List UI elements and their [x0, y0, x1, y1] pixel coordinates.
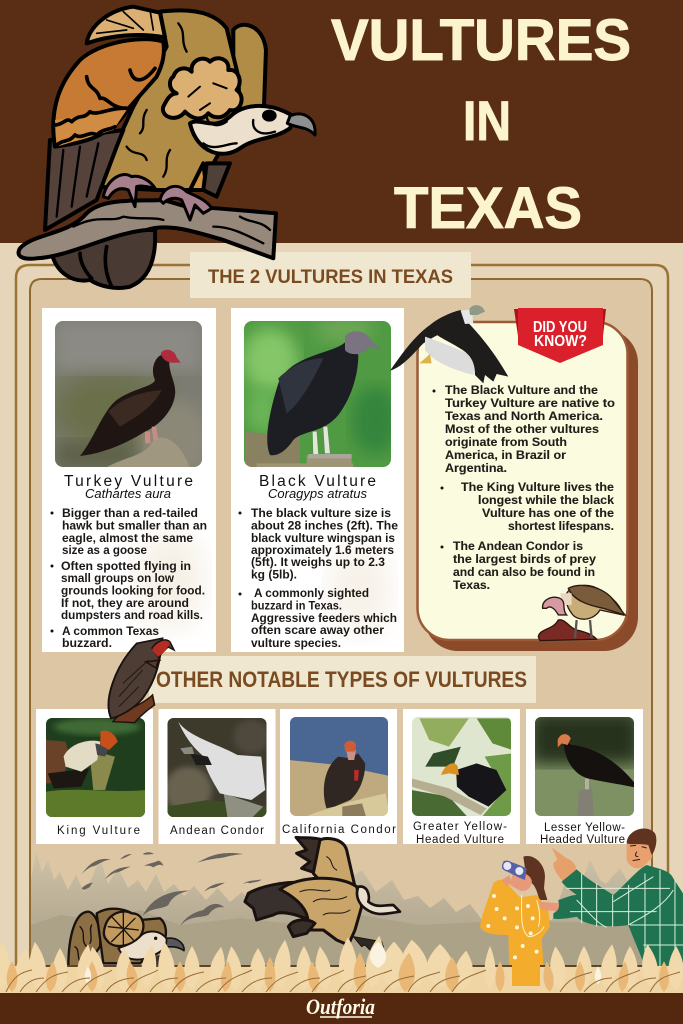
head: [627, 837, 654, 868]
badge: did you know: DID YOU: [533, 319, 587, 336]
icon: perched turkey vulture: [109, 638, 162, 723]
heading: the 2 vultures in texas: THE 2 VULTURES IN TEXAS: [208, 267, 453, 288]
ruff: [163, 58, 242, 119]
bullets: turkey vulture: small groups on low: [61, 572, 175, 585]
fact: andean condor: the largest birds of prey: [453, 552, 596, 566]
fact: lifespans: shortest lifespans.: [508, 519, 614, 533]
bullets: black vulture: (5ft). It weighs up to 2.3: [251, 556, 386, 569]
card: andean condor: Andean Condor: [170, 825, 264, 837]
latin name: cathartes aura: Cathartes aura: [85, 487, 171, 501]
card: king vulture: King Vulture: [57, 825, 140, 837]
fact: andean condor: and can also be found in: [453, 565, 595, 579]
icon: flying condor: [390, 305, 508, 383]
bullets: turkey vulture: Bigger than a red-tailed: [62, 507, 198, 520]
wheat grass foreground: [0, 934, 683, 993]
bullets: black vulture: [238, 507, 399, 650]
footer band: [0, 993, 683, 1024]
fact: native vultures: originate from South: [445, 435, 567, 449]
near wing: [296, 837, 327, 873]
bullets: turkey vulture: buzzard.: [62, 637, 112, 650]
tail feathers: [52, 230, 155, 288]
fact: andean condor: [440, 539, 596, 592]
panel: did you know: [418, 322, 638, 651]
heading: the 2 vultures in texas: [190, 252, 471, 298]
bullets: turkey vulture: eagle, almost the same: [62, 532, 194, 545]
bullets: turkey vulture: size as a goose: [62, 544, 148, 557]
fact: lifespans: Vulture has one of the: [482, 506, 614, 520]
card: lesser yellow-headed vulture: Headed Vulture: [540, 834, 625, 846]
bullets: turkey vulture: dumpsters and road kills.: [61, 609, 203, 622]
fact: native vultures: Turkey Vulture are native to: [445, 396, 615, 410]
card: california condor: California Condor: [282, 824, 396, 836]
fact: native vultures: The Black Vulture and the: [445, 383, 598, 397]
photo: greater yellow-headed vulture: [411, 717, 512, 818]
bullets: turkey vulture: A common Texas: [62, 625, 159, 638]
card: greater yellow-headed vulture: Headed Vulture: [416, 834, 504, 846]
photo: king vulture: [46, 717, 147, 818]
fact: lifespans: The King Vulture lives the: [461, 480, 614, 494]
tail: [288, 920, 315, 937]
body: [280, 878, 362, 945]
bullets: black vulture: Aggressive feeders which: [251, 612, 397, 625]
fact: andean condor: The Andean Condor is: [453, 539, 583, 553]
orange wing: [53, 39, 164, 147]
icon: perched vulture head: [146, 640, 174, 668]
rear wing: [233, 25, 266, 120]
illustration: large perched vulture: [19, 7, 315, 288]
head and neck: [190, 106, 295, 154]
title: TEXAS: [394, 176, 582, 241]
illustration: man pointing: [552, 829, 683, 967]
far wing: [245, 882, 323, 920]
fact: native vultures: Argentina.: [445, 461, 507, 475]
dark wing feathers: [45, 130, 123, 230]
bullets: turkey vulture: Often spotted flying in: [61, 560, 191, 573]
logo: outforia: Outforia: [306, 994, 375, 1019]
photo: turkey vulture: [55, 321, 202, 467]
card: lesser yellow-headed vulture: Lesser Yellow-: [544, 822, 625, 834]
tan crest: [87, 7, 165, 43]
photo: andean condor: [164, 717, 269, 818]
branch: [19, 200, 276, 259]
fact: native vultures: Most of the other vultures: [445, 422, 599, 436]
photo: california condor: [289, 717, 390, 818]
neck and head: [357, 886, 400, 914]
card: black vulture: [231, 308, 404, 652]
illustration: girl with binoculars: [480, 856, 563, 987]
latin name: coragyps atratus: Coragyps atratus: [268, 487, 367, 501]
bullets: turkey vulture: If not, they are around: [61, 597, 189, 610]
fact: native vultures: [432, 383, 615, 475]
heading: other notable types of vultures: OTHER NOTABLE TYPES OF VULTURES: [156, 667, 527, 692]
body: [97, 10, 240, 190]
legs: [353, 937, 383, 952]
bullets: black vulture: The black vulture size is: [251, 507, 391, 520]
icon: vulture on carcass: [538, 585, 625, 641]
card: lesser yellow-headed vulture: [526, 709, 643, 846]
bullets: black vulture: approximately 1.6 meters: [251, 544, 394, 557]
bullets: black vulture: vulture species.: [251, 637, 341, 650]
bullets: black vulture: A commonly sighted: [254, 587, 369, 600]
card: greater yellow-headed vulture: Greater Yellow-: [413, 821, 507, 833]
card: andean condor: [158, 709, 276, 844]
bullets: black vulture: often scare away other: [251, 624, 385, 637]
talons: [103, 175, 155, 207]
badge: did you know: KNOW?: [534, 333, 587, 350]
illustration: vulture in the grass: [68, 909, 184, 980]
bullets: turkey vulture: hawk but smaller than an: [62, 520, 207, 532]
photo: black vulture: [242, 316, 399, 467]
fact: andean condor: Texas.: [453, 578, 490, 592]
name: black vulture: Black Vulture: [259, 473, 376, 490]
title: VULTURES: [331, 8, 631, 73]
card: greater yellow-headed vulture: [403, 709, 520, 846]
bullets: black vulture: about 28 inches (2ft). The: [251, 520, 399, 532]
bullets: black vulture: buzzard in Texas.: [251, 600, 342, 612]
outer and inner frame: [16, 265, 668, 966]
eye: [262, 110, 277, 122]
arm and hand: [552, 847, 577, 883]
fact: lifespans: longest while the black: [478, 493, 614, 507]
fact: native vultures: America, in Brazil or: [445, 448, 566, 462]
card: california condor: [280, 709, 397, 844]
title: IN: [463, 89, 511, 152]
name: turkey vulture: Turkey Vulture: [64, 473, 193, 490]
shirt: [553, 865, 683, 967]
bullets: turkey vulture: [50, 507, 207, 650]
fact: lifespans: [440, 480, 614, 533]
forest background scenery: [31, 850, 651, 965]
top header band: [0, 0, 683, 243]
beak: [287, 114, 315, 135]
shirt grid: [567, 870, 683, 967]
fact: native vultures: Texas and North America.: [445, 409, 603, 423]
title: [331, 8, 631, 241]
photo: lesser yellow-headed vulture: [535, 717, 634, 816]
illustration: flying vulture: [245, 837, 400, 952]
badge: did you know: [514, 308, 606, 363]
bullets: turkey vulture: grounds looking for food.: [61, 584, 205, 598]
card: king vulture: [36, 709, 153, 844]
birds flock: [82, 852, 262, 926]
heading: other notable types of vultures: [149, 656, 536, 703]
bullets: black vulture: black vulture wingspan is: [251, 532, 395, 545]
bullets: black vulture: kg (5lb).: [251, 568, 297, 582]
card: turkey vulture: [42, 308, 216, 652]
